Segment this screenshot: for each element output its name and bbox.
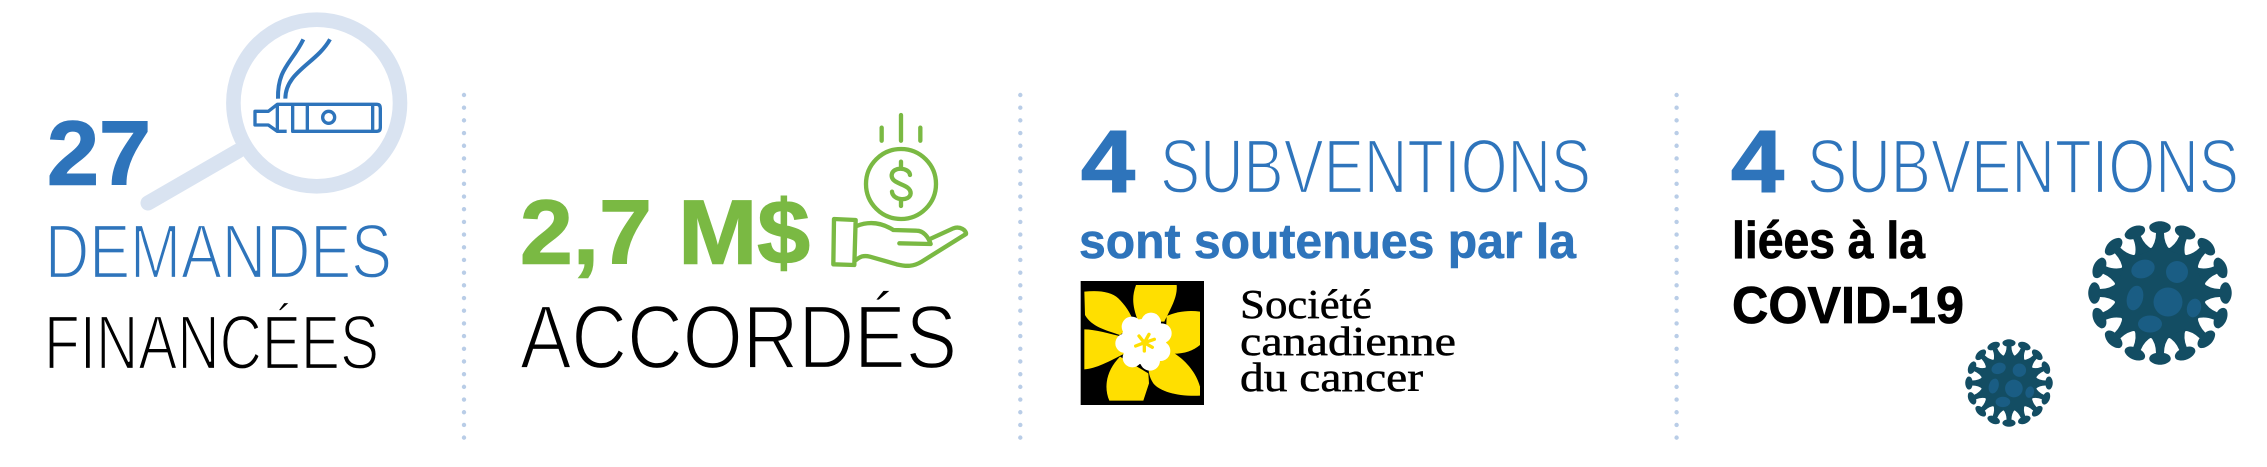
logo text: société canadienne du cancer: du cancer (1240, 354, 1423, 400)
text: sont soutenues par la: sont soutenues par la (1079, 215, 1577, 269)
icon: e-cigarette (255, 39, 380, 131)
panel: subventions covid-19 (1731, 112, 2239, 427)
icon: small virus (1965, 339, 2053, 427)
icon: magnifying glass (148, 20, 400, 203)
text: demandes: DEMANDES (45, 209, 392, 295)
number: 4: 4 (1731, 112, 1784, 211)
text: accordés: ACCORDÉS (520, 288, 957, 388)
logo text: société canadienne du cancer (1240, 281, 1456, 400)
text: liées à la: liées à la (1732, 212, 1926, 270)
panel: montant accordé (520, 115, 966, 388)
icon: hand with coin (833, 115, 966, 266)
logo text: société canadienne du cancer: canadienne (1240, 318, 1456, 364)
logo: daffodil (1081, 281, 1204, 405)
panel: demandes financées (44, 20, 400, 386)
text: subventions: SUBVENTIONS (1160, 124, 1591, 210)
number: 27: 27 (47, 104, 151, 204)
number: 2,7 M$: 2,7 M$ (520, 182, 810, 284)
text: covid-19: COVID-19 (1732, 277, 1964, 335)
logo text: société canadienne du cancer: Société (1240, 281, 1372, 327)
number: 4: 4 (1081, 112, 1135, 211)
text: financées: FINANCÉES (44, 300, 379, 386)
icon: large virus (2088, 221, 2232, 365)
panel: subventions société canadienne du cancer (1079, 112, 1591, 405)
